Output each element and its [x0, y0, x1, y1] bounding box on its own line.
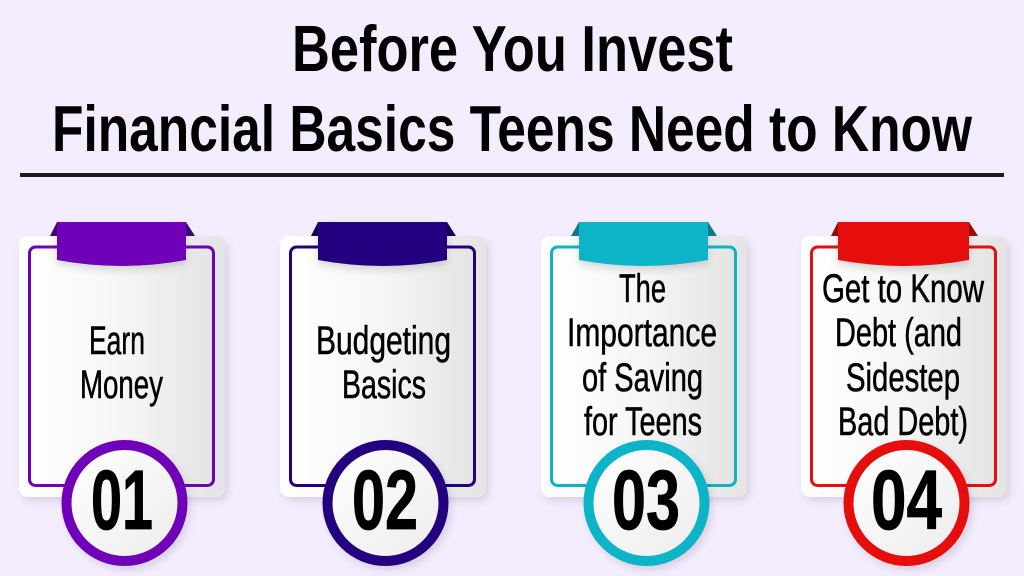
card 2 clipboard [280, 236, 486, 497]
card 3 ribbon [571, 222, 717, 266]
card 4 text: Debt (and [835, 311, 962, 355]
card 4 clipboard [801, 236, 1007, 497]
card 1 border [30, 247, 214, 486]
panel: card 4 Get to Know Debt [801, 222, 1007, 561]
card 1 badge: 01 [91, 453, 153, 547]
card 3 badge [588, 445, 704, 561]
card 4 ribbon [831, 222, 978, 266]
card 2 badge [328, 445, 444, 561]
card 1 badge [66, 445, 182, 561]
card 4 text [822, 267, 984, 444]
card 3 text: Importance [567, 311, 717, 355]
card 2 ribbon [311, 222, 456, 266]
title: Before You Invest [292, 12, 733, 85]
card 1 ribbon [50, 222, 195, 266]
card 2 text: Budgeting [316, 319, 451, 363]
card 2 text: Basics [342, 363, 426, 407]
card 2 border [290, 247, 474, 486]
card 4 text: Bad Debt) [838, 400, 968, 444]
card 1 text [80, 319, 163, 407]
card 3 badge: 03 [612, 453, 680, 547]
card 1 text: Earn [89, 319, 145, 363]
card 3 text: The [619, 267, 666, 311]
card 1 text: Money [80, 363, 163, 407]
card 3 clipboard [541, 236, 747, 497]
card 2 text [316, 319, 451, 407]
title divider [20, 173, 1004, 177]
card 4 badge [848, 445, 964, 561]
card 3 text: of Saving [582, 356, 703, 400]
card 1 clipboard [19, 236, 225, 497]
panel: card 1 Earn Money [19, 222, 225, 561]
card 3 border [552, 247, 736, 486]
card 2 badge: 02 [352, 453, 418, 547]
card 3 text: for Teens [584, 400, 702, 444]
title [52, 12, 972, 165]
panel: card 3 The Importance of Saving for Teens [541, 222, 747, 561]
card 4 badge: 04 [871, 453, 942, 547]
card 3 text [567, 267, 717, 444]
panel: card 2 Budgeting Basics [280, 222, 486, 561]
card 4 border [812, 247, 996, 486]
card 4 text: Sidestep [846, 356, 960, 400]
